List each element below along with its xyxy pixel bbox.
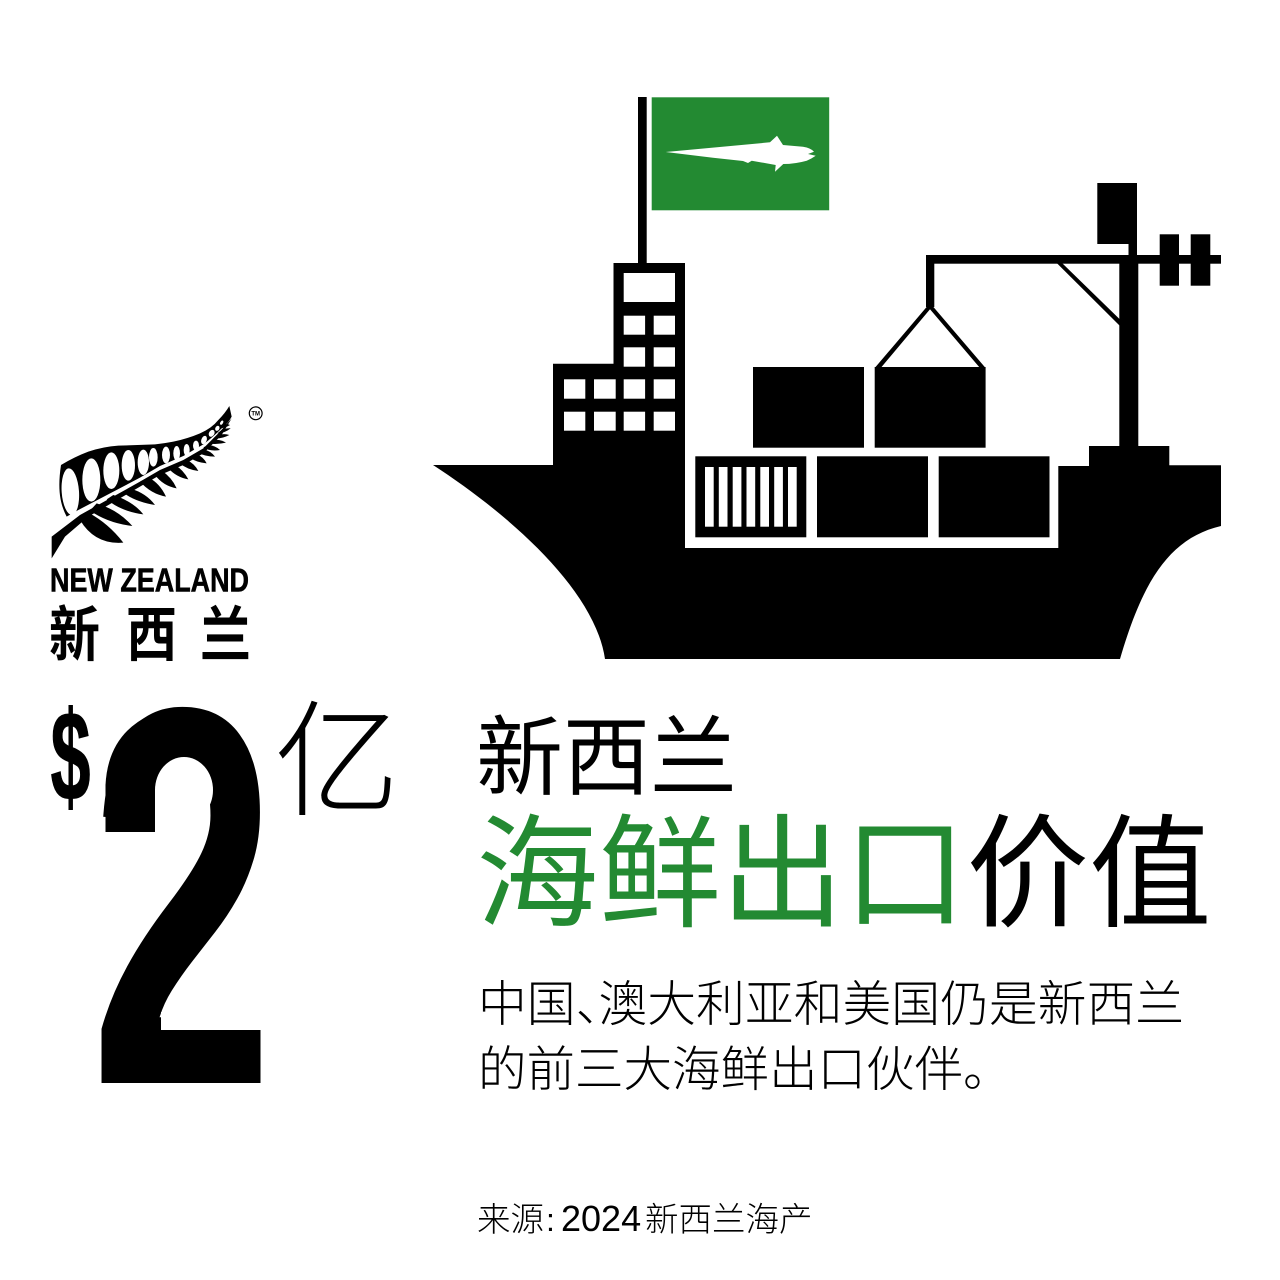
lower container middle: [817, 456, 928, 537]
source note: 2024: [561, 1198, 641, 1239]
description text: 澳大利亚和美国仍是新西兰: [598, 978, 1184, 1032]
icon: silver fern: [52, 406, 232, 558]
hoisted container: [875, 367, 986, 448]
crane sling: [875, 303, 986, 368]
striped container: [695, 456, 806, 537]
source note: :: [546, 1202, 555, 1238]
logo wordmark: NEW ZEALAND: [50, 562, 249, 598]
numeral 2: 2: [92, 602, 275, 1193]
description text: 的前三大海鲜出口伙伴。: [478, 1043, 1012, 1097]
description text: [478, 978, 1184, 1097]
heading line 1: 新西兰: [476, 710, 737, 807]
lower container right: [939, 456, 1050, 537]
big stat: $2亿: [50, 602, 400, 1193]
source note: 来源: [477, 1202, 544, 1239]
illustration: cargo ship: [433, 97, 1221, 659]
logo Chinese wordmark: 新西兰: [49, 602, 251, 669]
flag with fish icon: [652, 97, 829, 210]
trademark mark: [249, 407, 262, 420]
ship hull and superstructure: [433, 263, 1221, 659]
upper container: [753, 367, 864, 448]
unit: 亿: 亿: [274, 692, 400, 833]
bridge windows: [564, 273, 675, 431]
heading line 2: 海鲜出口价值: [476, 806, 1212, 943]
logo: New Zealand fern: [49, 406, 262, 669]
flag pole: [638, 97, 647, 267]
dollar sign: $: [50, 684, 91, 827]
source note: 新西兰海产: [645, 1202, 812, 1239]
trademark mark: TM: [251, 412, 260, 418]
description text: 中国、: [478, 978, 624, 1032]
crane mast and boom: [926, 183, 1221, 447]
heading: [476, 710, 1212, 943]
